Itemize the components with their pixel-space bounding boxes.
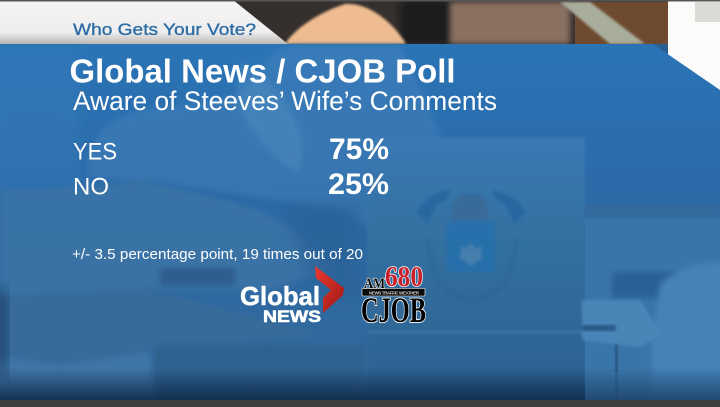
result row: yes: YES	[73, 138, 117, 166]
result row: yes	[73, 133, 389, 166]
margin of error note: +/- 3.5 percentage point, 19 times out of 20	[72, 247, 363, 263]
background photo strip	[0, 0, 720, 100]
logo: AM 680 CJOB	[361, 261, 426, 330]
result row: yes: 75%	[329, 133, 389, 166]
bottom fade	[0, 368, 720, 400]
result row: no	[73, 168, 389, 201]
subtitle: Aware of Steeves’ Wife’s Comments	[73, 86, 497, 116]
header title: Who Gets Your Vote?	[73, 20, 256, 39]
icon: red chevron	[315, 266, 344, 313]
logo: Global News: NEWS	[263, 308, 321, 326]
logo: AM 680 CJOB: NEWS TRAFFIC WEATHER	[369, 290, 420, 296]
result row: no: NO	[73, 174, 109, 200]
right side table	[585, 218, 720, 400]
logo: Global News	[240, 266, 344, 326]
logo: AM 680 CJOB: AM	[364, 276, 385, 292]
logo: Global News: Global	[240, 281, 320, 311]
logo: AM 680 CJOB: 680	[385, 261, 423, 293]
title: Global News / CJOB Poll	[70, 52, 456, 90]
ballot box	[367, 138, 585, 400]
crest on ballot box	[416, 190, 526, 300]
logo: AM 680 CJOB: CJOB	[361, 290, 426, 330]
header tab	[0, 2, 288, 44]
result row: no: 25%	[328, 168, 389, 201]
bottom bar	[0, 400, 720, 407]
hand	[285, 4, 406, 44]
